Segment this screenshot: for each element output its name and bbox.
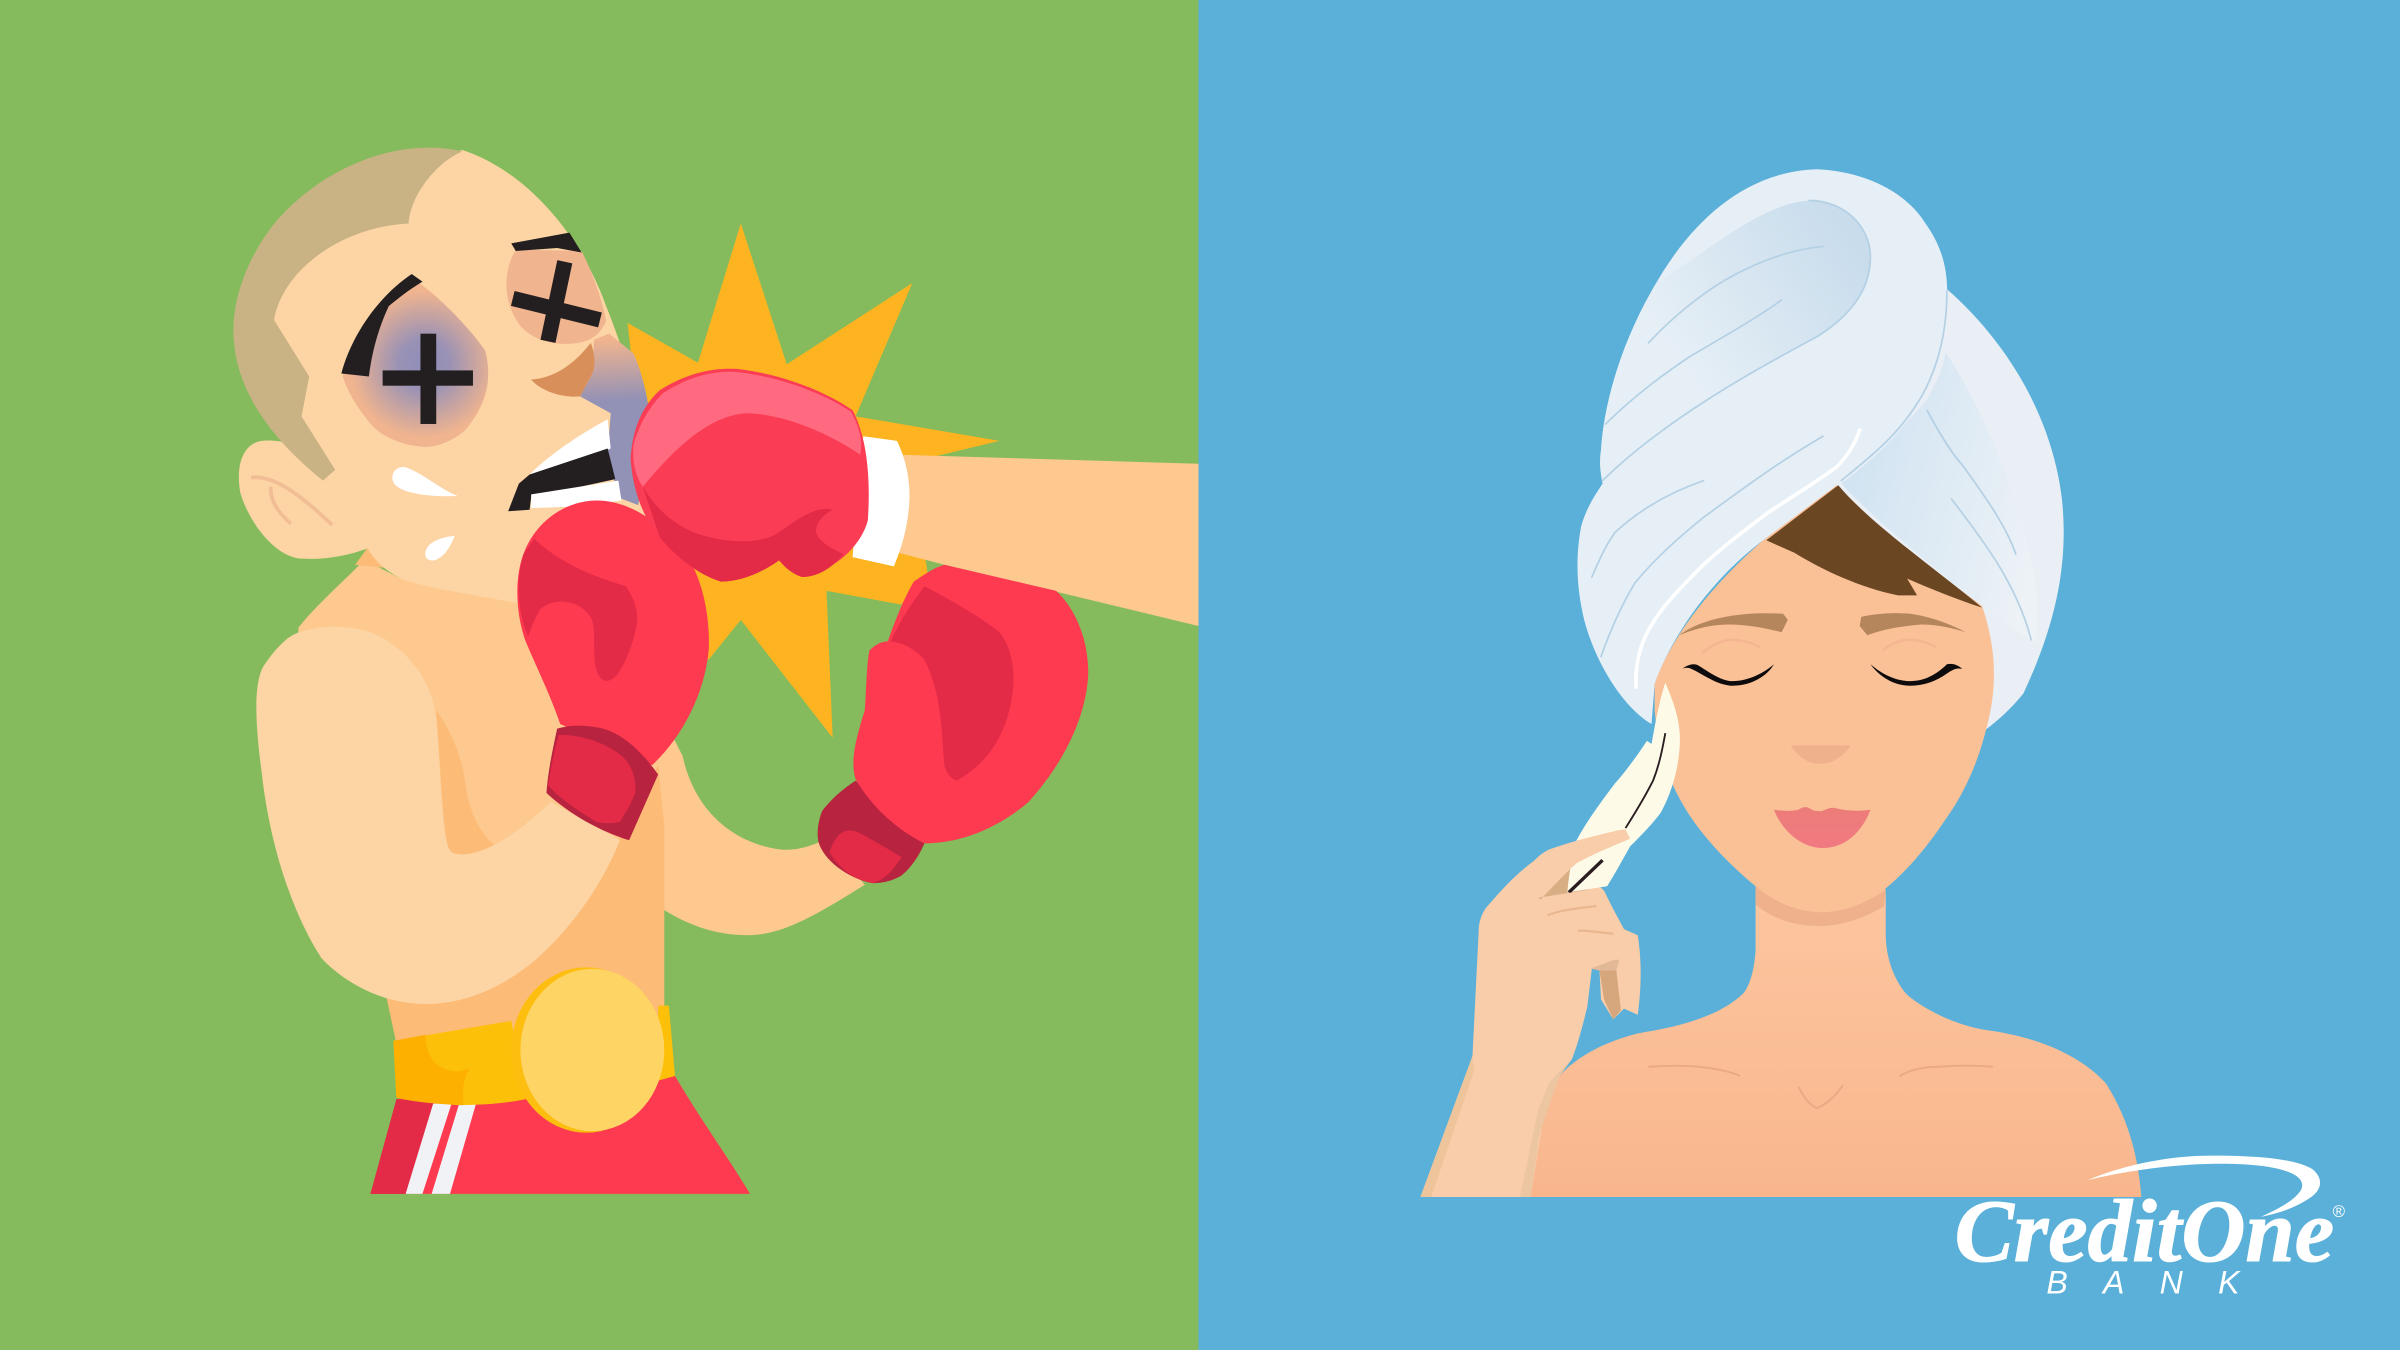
arm and hand xyxy=(1420,854,1641,1197)
shorts white stripe one xyxy=(406,1104,452,1194)
hair xyxy=(1766,485,1982,608)
impact starburst xyxy=(628,223,999,738)
closed eye left xyxy=(1682,664,1774,686)
punching glove xyxy=(631,369,869,582)
lower glove cuff inner xyxy=(830,831,902,883)
sweat drop xyxy=(425,536,455,560)
neck and shoulders xyxy=(1531,886,2141,1197)
thumb xyxy=(1508,830,1630,903)
sweat on cheek xyxy=(392,467,458,496)
guard glove body xyxy=(517,501,709,765)
finger shadow upper xyxy=(1592,960,1619,970)
chin shadow xyxy=(1756,886,1886,926)
towel crease lower long xyxy=(1601,436,1823,657)
eyelid creases xyxy=(1702,640,1936,654)
towel crease right two xyxy=(1952,499,2031,640)
closed eye right xyxy=(1870,664,1962,686)
feather quill xyxy=(1569,860,1603,892)
face xyxy=(1655,485,1994,914)
belt strap xyxy=(393,1021,527,1105)
medallion rim xyxy=(511,967,661,1133)
belt right end xyxy=(658,1006,675,1081)
left eyebrow xyxy=(341,274,422,377)
finger shadow xyxy=(1599,970,1621,1019)
logo bank line: BANK xyxy=(2046,1264,2275,1300)
medallion face xyxy=(520,969,664,1131)
guard glove xyxy=(517,501,709,840)
left cross horizontal xyxy=(383,370,473,386)
belt shaded end xyxy=(393,1035,470,1105)
towel crease fold edge xyxy=(1603,201,1870,481)
shorts dark side xyxy=(370,1099,433,1194)
thumb web shadow xyxy=(1538,842,1626,903)
collarbone notch xyxy=(1798,1085,1843,1108)
towel under fold xyxy=(1841,352,2037,643)
shorts white stripe two xyxy=(432,1104,476,1194)
lower glove body xyxy=(853,565,1088,843)
arm edge shade xyxy=(1420,1056,1474,1197)
towel crease main wrap xyxy=(1841,291,1947,481)
punching glove body xyxy=(631,369,869,582)
guard glove shade xyxy=(519,539,637,681)
towel fold lines xyxy=(1592,201,2031,657)
back arm xyxy=(643,735,865,935)
boxer illustration xyxy=(233,148,1198,1194)
woman illustration xyxy=(1420,169,2141,1197)
left bruised eye socket xyxy=(343,280,488,447)
punching glove shade xyxy=(643,487,843,582)
shorts xyxy=(370,1076,750,1194)
right cross stroke one xyxy=(548,262,565,341)
feather shaft xyxy=(1626,733,1665,828)
feather xyxy=(1567,683,1680,892)
panel: green background xyxy=(0,0,1198,1350)
logo wordmark: CreditOne xyxy=(1955,1183,2334,1281)
lower hand fingers xyxy=(1531,888,1624,980)
punching glove highlight xyxy=(633,372,861,487)
lower glove cuff outer xyxy=(818,781,924,883)
logo: Credit One Bank xyxy=(1955,1156,2346,1300)
panel: blue background xyxy=(1198,0,2400,1350)
towel back lobe xyxy=(1837,288,2064,730)
nose xyxy=(531,343,594,397)
front arm xyxy=(256,627,620,1004)
lower teeth xyxy=(531,481,621,508)
right cross stroke two xyxy=(513,298,600,320)
cheek bruise xyxy=(580,334,651,505)
white glove cuff xyxy=(853,436,909,566)
torso lower xyxy=(383,765,664,1044)
left eye cross xyxy=(383,334,473,424)
hair xyxy=(233,148,462,481)
torso upper xyxy=(291,560,673,918)
clavicle lines xyxy=(1648,1066,1993,1076)
towel inner fold xyxy=(1600,201,1870,481)
guard cuff outer xyxy=(546,726,658,840)
shorts main panel xyxy=(370,1076,750,1194)
logo swoosh xyxy=(2088,1156,2320,1217)
head xyxy=(260,150,649,606)
lower glove shade xyxy=(891,586,1014,781)
knuckle lines xyxy=(1547,906,1613,934)
right eye socket xyxy=(506,249,606,344)
right eyebrow woman xyxy=(1860,613,1965,635)
right eyebrow xyxy=(511,233,582,253)
towel crease lower left xyxy=(1592,481,1704,577)
lips xyxy=(1774,807,1870,848)
lower guard glove xyxy=(818,565,1088,883)
guard cuff inner xyxy=(548,735,635,823)
towel crease right one xyxy=(1927,410,2016,554)
towel crease upper xyxy=(1648,246,1823,343)
arm inner edge shade xyxy=(1520,1059,1572,1197)
ear xyxy=(239,441,369,559)
towel crease middle xyxy=(1606,300,1782,424)
arm crease shadow xyxy=(436,710,494,854)
mouth interior xyxy=(508,448,615,511)
eyebrows xyxy=(1679,613,1965,635)
towel white highlight xyxy=(1636,430,1860,687)
punching arm xyxy=(880,455,1198,626)
belt xyxy=(393,967,675,1133)
left cross vertical xyxy=(420,334,436,424)
logo registered mark: ® xyxy=(2333,1202,2346,1221)
upper teeth xyxy=(530,419,611,479)
right eye cross xyxy=(513,262,600,341)
mouth xyxy=(508,419,621,511)
nose xyxy=(1791,745,1851,764)
ear inner lines xyxy=(251,477,332,525)
towel main wrap xyxy=(1577,169,1947,724)
neck shadow xyxy=(355,548,386,568)
left eyebrow woman xyxy=(1679,613,1788,635)
